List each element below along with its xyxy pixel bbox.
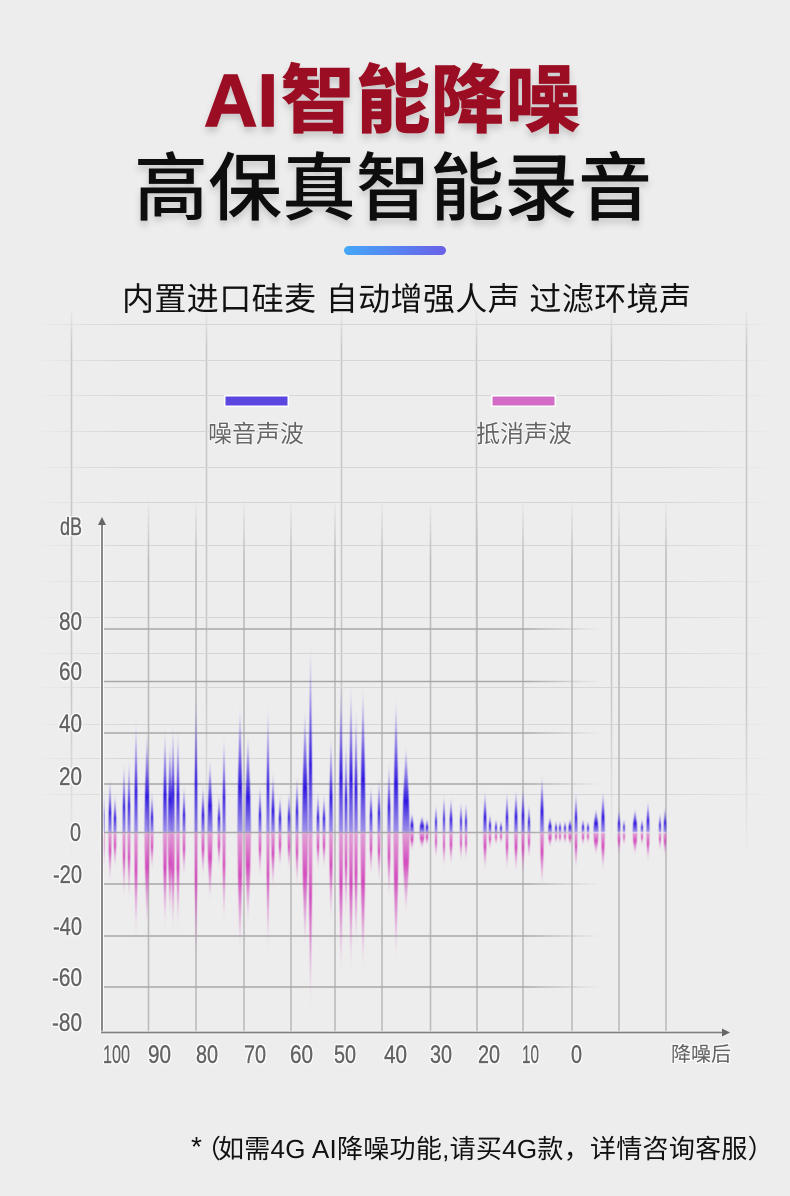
y axis labels: -20 bbox=[53, 861, 82, 889]
y axis labels: 80 bbox=[59, 608, 82, 636]
faint background grid bbox=[30, 310, 780, 860]
y axis labels: 60 bbox=[59, 658, 82, 686]
title: AI noise reduction: 智能降噪 bbox=[281, 59, 581, 142]
x axis with arrow bbox=[101, 1028, 730, 1036]
chart horizontal grid lines bbox=[104, 629, 600, 987]
x axis labels: 30 bbox=[430, 1041, 452, 1069]
chart bbox=[52, 500, 731, 1069]
y axis labels: -60 bbox=[52, 964, 82, 992]
y axis labels: 40 bbox=[59, 710, 82, 738]
x axis labels: 80 bbox=[196, 1041, 218, 1069]
x axis labels: 90 bbox=[148, 1041, 171, 1069]
x axis labels: 40 bbox=[384, 1041, 407, 1069]
legend: cancelling wave: 抵消声波 bbox=[476, 421, 572, 448]
x axis labels: 10 bbox=[522, 1041, 539, 1069]
chart vertical grid lines bbox=[148, 500, 666, 1032]
y axis with arrow bbox=[98, 517, 106, 1033]
noise waveform bbox=[101, 640, 667, 832]
footnote: （ bbox=[195, 1134, 221, 1164]
legend: noise wave: 噪音声波 bbox=[208, 421, 304, 448]
x axis labels: 60 bbox=[290, 1041, 313, 1069]
y axis labels: 20 bbox=[59, 763, 82, 791]
accent bar bbox=[344, 246, 446, 255]
x axis labels: 20 bbox=[478, 1041, 500, 1069]
x axis labels: 降噪后 bbox=[671, 1043, 731, 1066]
x axis labels: 100 bbox=[103, 1041, 130, 1069]
title: AI noise reduction: AI bbox=[204, 59, 278, 142]
heading: high fidelity recording: 高保真智能录音 bbox=[134, 147, 652, 230]
footnote: 如需4G AI降噪功能,请买4G款，详情咨询客服） bbox=[218, 1134, 774, 1164]
x axis labels: 0 bbox=[571, 1041, 582, 1069]
y axis labels: dB bbox=[60, 513, 82, 541]
cancelling waveform bbox=[101, 833, 667, 1013]
y axis labels: -80 bbox=[52, 1009, 82, 1037]
y axis labels: 0 bbox=[70, 819, 81, 847]
x axis labels: 50 bbox=[334, 1041, 356, 1069]
y axis labels bbox=[52, 513, 82, 1037]
footnote: * bbox=[191, 1131, 202, 1162]
x axis labels: 70 bbox=[244, 1041, 266, 1069]
x axis labels bbox=[103, 1041, 731, 1069]
legend: cancelling wave bbox=[476, 395, 572, 448]
legend: noise wave bbox=[208, 395, 304, 448]
y axis labels: -40 bbox=[53, 913, 82, 941]
subtitle: 内置进口硅麦 自动增强人声 过滤环境声 bbox=[122, 281, 691, 317]
